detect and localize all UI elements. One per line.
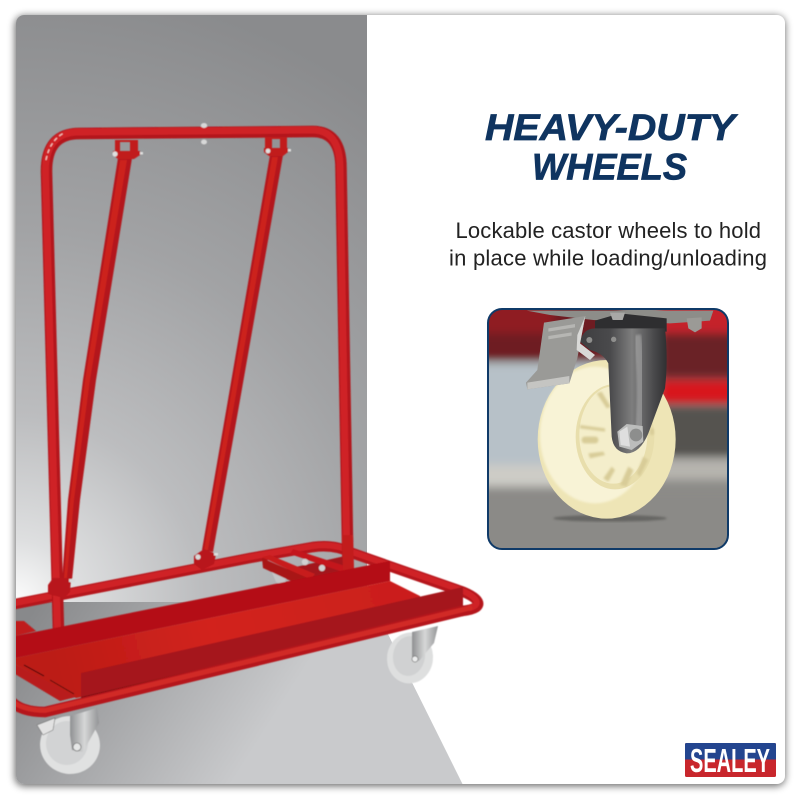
swivel fork xyxy=(580,328,667,453)
description text: in place while loading/unloading xyxy=(449,246,767,270)
fork rivets xyxy=(586,337,616,343)
lower pivot: left brace xyxy=(48,578,75,598)
wheel tyre xyxy=(538,360,676,519)
panel: castor wheel close-up photo xyxy=(487,308,729,550)
panel: product photo backdrop xyxy=(10,15,478,785)
frame upright lower segment in front of cross member xyxy=(342,535,354,572)
top mounting plate xyxy=(527,311,713,332)
tray: floor xyxy=(15,581,420,698)
description text: Lockable castor wheels to hold xyxy=(456,218,761,243)
product: red drywall trolley xyxy=(10,123,478,778)
photo border xyxy=(488,309,728,549)
brake lever xyxy=(526,316,595,389)
lower pivot: right brace xyxy=(194,549,218,570)
front base rail xyxy=(10,608,470,712)
centre joint bolt xyxy=(201,123,207,144)
icon: rear hidden wheel xyxy=(271,572,287,584)
photo background xyxy=(489,310,727,548)
tray: back wall xyxy=(15,561,390,658)
icon: left castor wheel xyxy=(38,710,100,774)
tray: underside shadow xyxy=(80,677,166,698)
icon: right castor wheel xyxy=(384,626,438,686)
left stub rail xyxy=(15,621,36,636)
rear base rail xyxy=(10,545,478,611)
tray: lower lip xyxy=(15,664,76,701)
brace: left xyxy=(62,158,132,580)
top bracket: left xyxy=(112,140,143,159)
studio floor xyxy=(15,602,463,785)
tray: front wall xyxy=(81,587,463,698)
frame: tall tube xyxy=(45,130,348,632)
description text xyxy=(449,218,767,270)
wheel hub xyxy=(576,384,654,489)
top bracket: right xyxy=(264,137,291,156)
axle nut xyxy=(617,424,643,450)
heading: WHEELS xyxy=(532,146,687,188)
heading xyxy=(485,106,738,188)
brace: right xyxy=(202,155,283,552)
base cross members xyxy=(262,549,345,582)
heading: HEAVY-DUTY xyxy=(485,106,738,148)
studio wall xyxy=(15,15,367,605)
wheel shadow xyxy=(553,515,667,522)
